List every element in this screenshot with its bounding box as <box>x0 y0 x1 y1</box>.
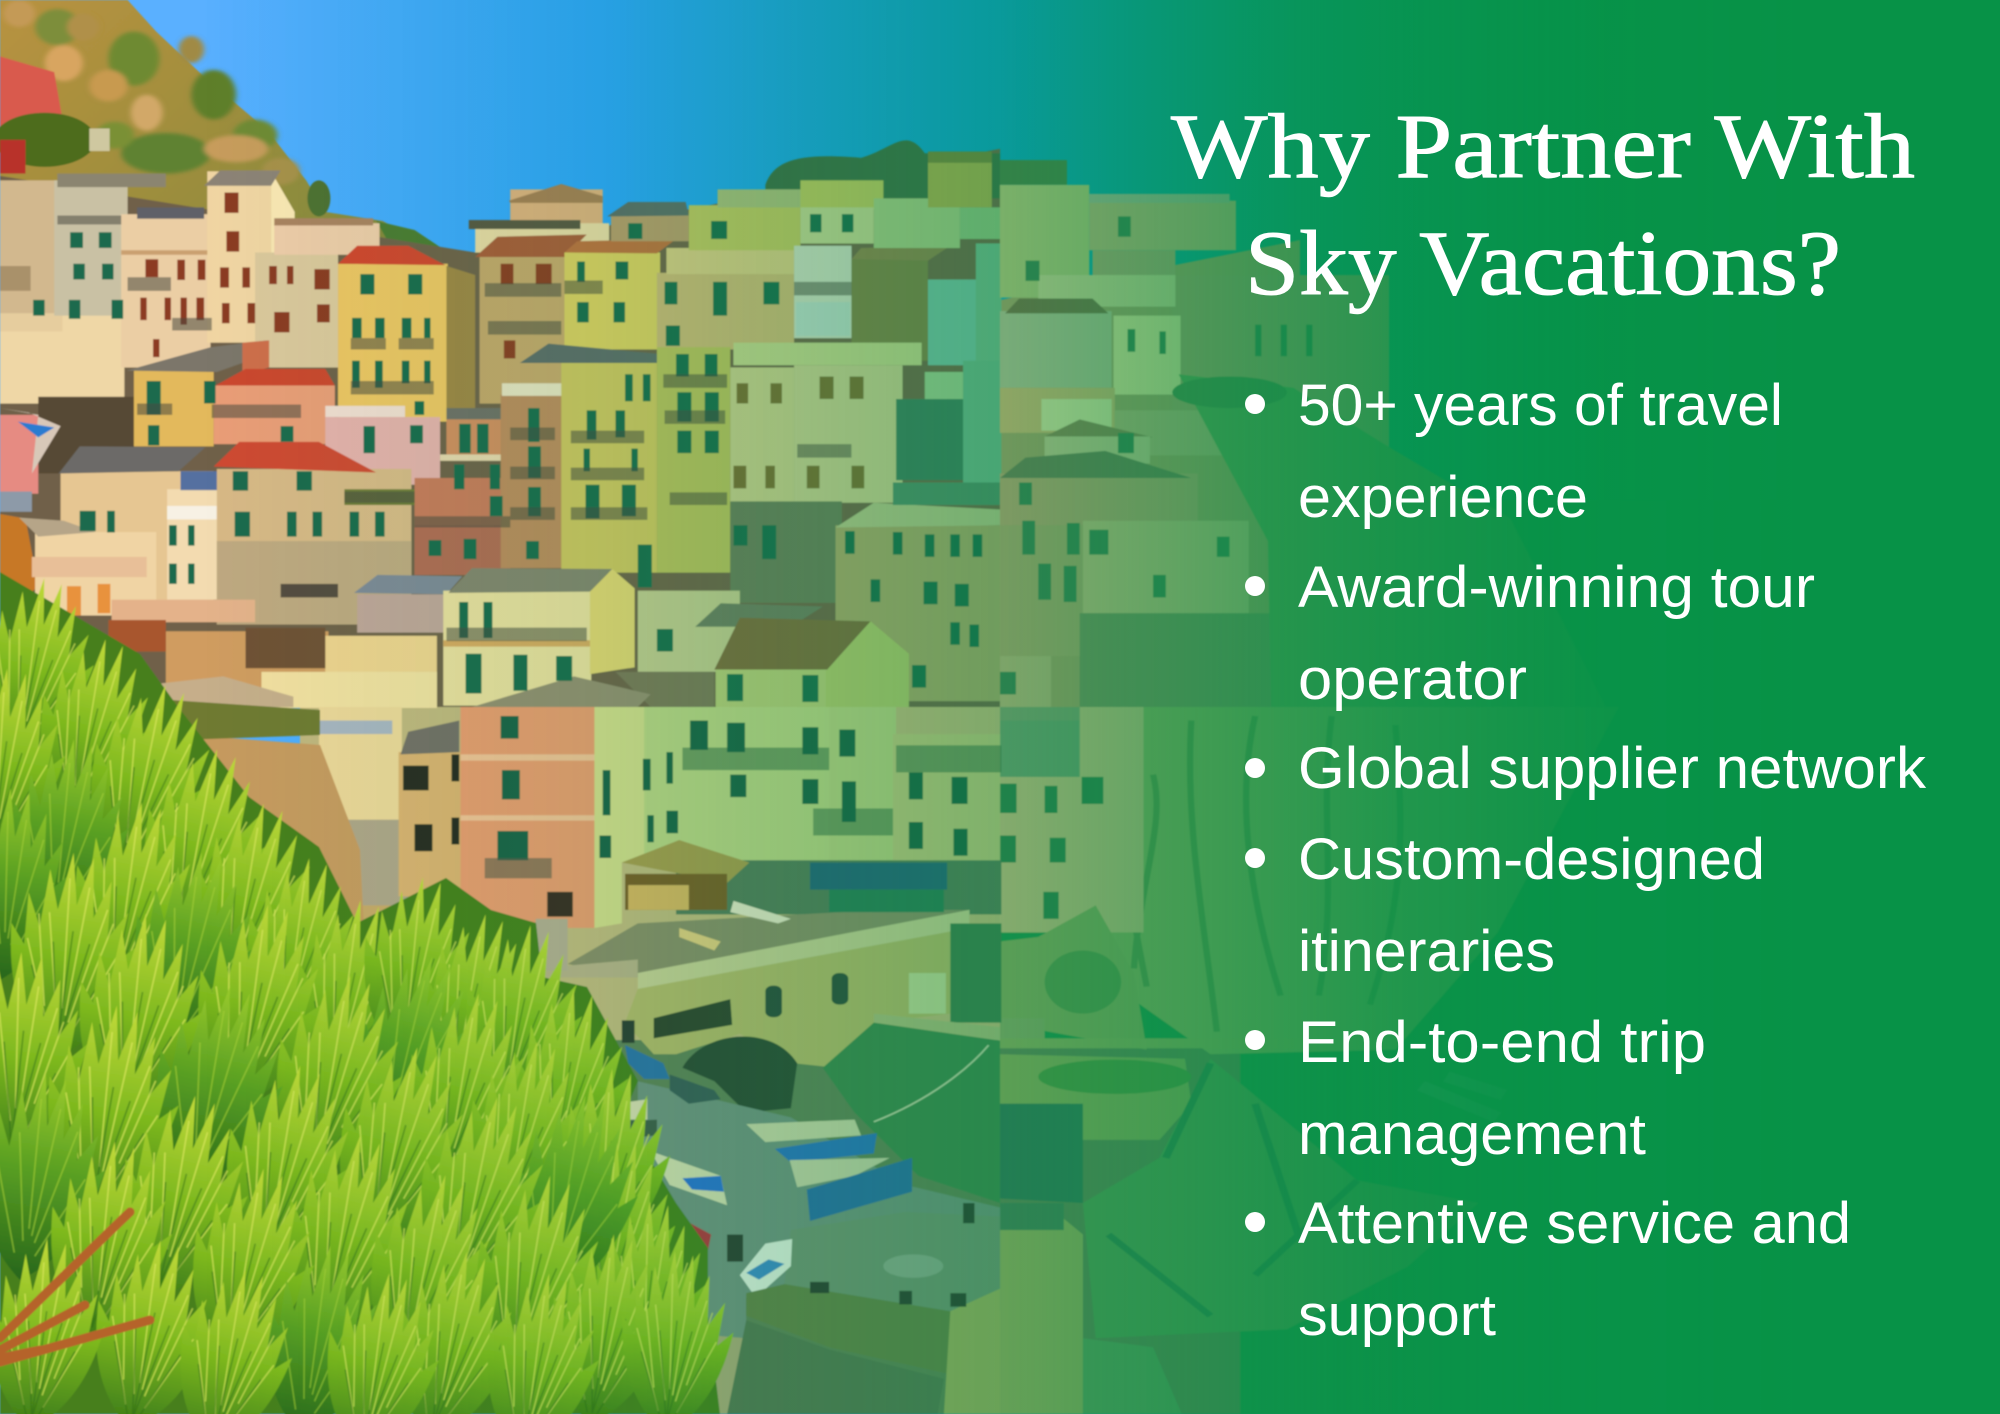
bullet: travel experience: experience <box>1298 465 1588 530</box>
photo: sea and far headland <box>1000 500 2000 1414</box>
title <box>1171 95 1915 314</box>
photo: terrace plants above the wall <box>170 700 320 740</box>
plants on the top terrace <box>765 140 1000 198</box>
pine mass <box>0 572 720 1414</box>
photo: backing behind the town and harbour <box>280 240 1300 1414</box>
bullet: tour operator <box>1245 555 1815 712</box>
bullet: travel experience <box>1245 373 1783 530</box>
title: Why Partner With <box>1171 95 1915 197</box>
bullet: tour operator: Award-winning tour <box>1298 555 1815 620</box>
photo: hillside town, middle buildings <box>0 340 1001 701</box>
photo: stone wall above the pine <box>190 735 365 950</box>
photo: hillside town, lower buildings <box>108 568 909 708</box>
bullet: trip management: management <box>1298 1102 1646 1167</box>
backing behind the houses <box>0 149 1000 707</box>
photo: balconies <box>57 216 851 641</box>
photo: cliff face and rocks <box>1000 707 1619 1414</box>
photo: buildings behind the heading <box>1000 160 1606 707</box>
photo: quay with moored boats <box>609 1020 1000 1414</box>
title: Sky Vacations? <box>1245 212 1841 314</box>
pine branch <box>0 1212 150 1362</box>
bullet: travel experience: 50+ years of travel <box>1298 373 1783 438</box>
photo: hillside town, upper buildings <box>0 140 1001 707</box>
bullet: custom itineraries <box>1245 827 1765 984</box>
photo: window shutters (green) <box>33 214 982 702</box>
bullet: custom itineraries: Custom-designed <box>1298 827 1765 892</box>
bullet: attentive service: support <box>1298 1283 1496 1348</box>
bullet: attentive service <box>1245 1191 1851 1348</box>
photo: window shutters (brown) <box>140 193 864 488</box>
bullet: attentive service: Attentive service and <box>1298 1191 1851 1256</box>
photo: pine tree in the foreground <box>0 569 741 1414</box>
bullet: custom itineraries: itineraries <box>1298 919 1555 984</box>
bullet: trip management <box>1245 1010 1706 1167</box>
photo: hillside at top left <box>0 0 475 406</box>
photo: harbour, restaurant and bridge <box>319 707 1001 1203</box>
bullet: trip management: End-to-end trip <box>1298 1010 1706 1075</box>
bullet list <box>1245 373 1927 1348</box>
bullet: tour operator: operator <box>1298 647 1527 712</box>
bullet: supplier network: Global supplier network <box>1298 736 1927 801</box>
